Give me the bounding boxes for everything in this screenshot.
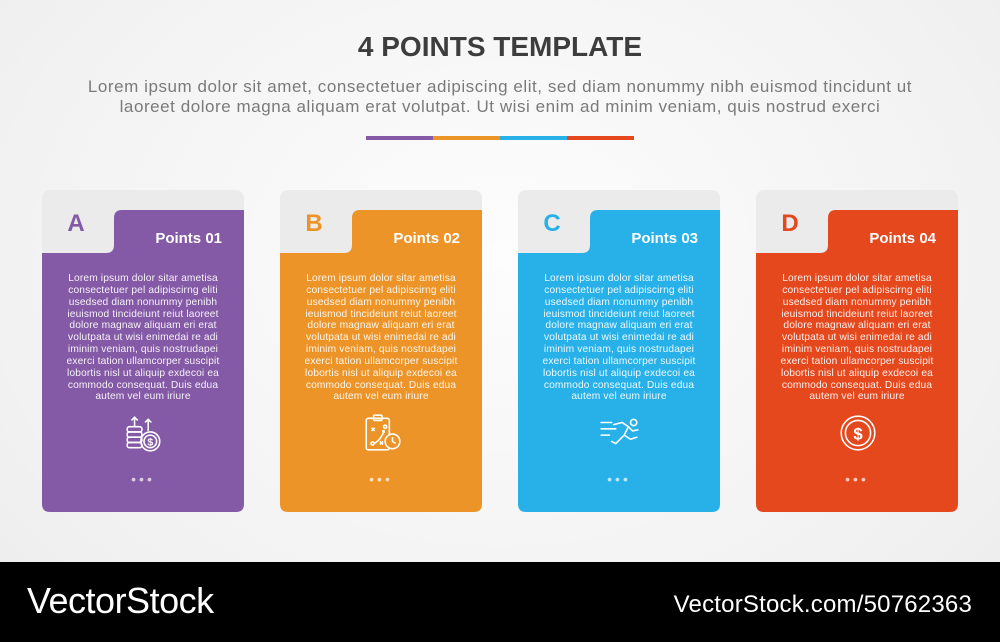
letter B: B	[305, 210, 323, 237]
icon: runner	[600, 418, 639, 444]
subtitle: Lorem ipsum dolor sit amet, consectetuer adipiscing elit, sed diam nonummy nibh euismod tincidunt ut	[88, 77, 912, 96]
letter D: D	[781, 210, 799, 237]
heading: Points 04	[869, 230, 936, 247]
dots: •••	[607, 471, 631, 487]
heading: Points 03	[631, 230, 698, 247]
divider	[366, 136, 634, 140]
card D	[756, 190, 958, 512]
letter A: A	[67, 210, 85, 237]
heading: Points 02	[393, 230, 460, 247]
title: 4 POINTS TEMPLATE	[358, 31, 642, 62]
footer bar	[0, 562, 1000, 642]
dots: •••	[845, 471, 869, 487]
subtitle	[88, 77, 912, 116]
text: Lorem ipsum dolor sitar ametisa consectetuer pel adipiscirng eliti usedsed diam nonummy penibh ieuismod tincideiunt reiut laoreet dolore magnaw aliquam eri erat volutpata ut wisi enimedai re adi iminim veniam, quis nostrudapei exerci tation ullamcorper suscipit lobortis nisl ut aliquip exdecoi ea commodo consequat. Duis edua autem vel eum iriure	[543, 273, 695, 402]
dots: •••	[369, 471, 393, 487]
card C	[518, 190, 720, 512]
dots: •••	[131, 471, 155, 487]
icon: coins: $	[147, 437, 153, 449]
icon: dollar coin: $	[853, 424, 863, 443]
icon: dollar coin	[840, 415, 876, 451]
footer logo: VectorStock	[27, 580, 214, 621]
letter C: C	[543, 210, 561, 237]
subtitle: laoreet dolore magna aliquam erat volutpat. Ut wisi enim ad minim veniam, quis nostrud exerci	[120, 97, 880, 116]
heading: Points 01	[155, 230, 222, 247]
icon: coins	[126, 416, 160, 452]
card B	[280, 190, 482, 512]
text: Lorem ipsum dolor sitar ametisa consectetuer pel adipiscirng eliti usedsed diam nonummy penibh ieuismod tincideiunt reiut laoreet dolore magnaw aliquam eri erat volutpata ut wisi enimedai re adi iminim veniam, quis nostrudapei exerci tation ullamcorper suscipit lobortis nisl ut aliquip exdecoi ea commodo consequat. Duis edua autem vel eum iriure	[67, 273, 219, 402]
footer url: VectorStock.com/50762363	[674, 591, 972, 618]
text: Lorem ipsum dolor sitar ametisa consectetuer pel adipiscirng eliti usedsed diam nonummy penibh ieuismod tincideiunt reiut laoreet dolore magnaw aliquam eri erat volutpata ut wisi enimedai re adi iminim veniam, quis nostrudapei exerci tation ullamcorper suscipit lobortis nisl ut aliquip exdecoi ea commodo consequat. Duis edua autem vel eum iriure	[781, 273, 933, 402]
card A	[42, 190, 244, 512]
text: Lorem ipsum dolor sitar ametisa consectetuer pel adipiscirng eliti usedsed diam nonummy penibh ieuismod tincideiunt reiut laoreet dolore magnaw aliquam eri erat volutpata ut wisi enimedai re adi iminim veniam, quis nostrudapei exerci tation ullamcorper suscipit lobortis nisl ut aliquip exdecoi ea commodo consequat. Duis edua autem vel eum iriure	[305, 273, 457, 402]
icon: strategy clipboard	[365, 414, 401, 451]
